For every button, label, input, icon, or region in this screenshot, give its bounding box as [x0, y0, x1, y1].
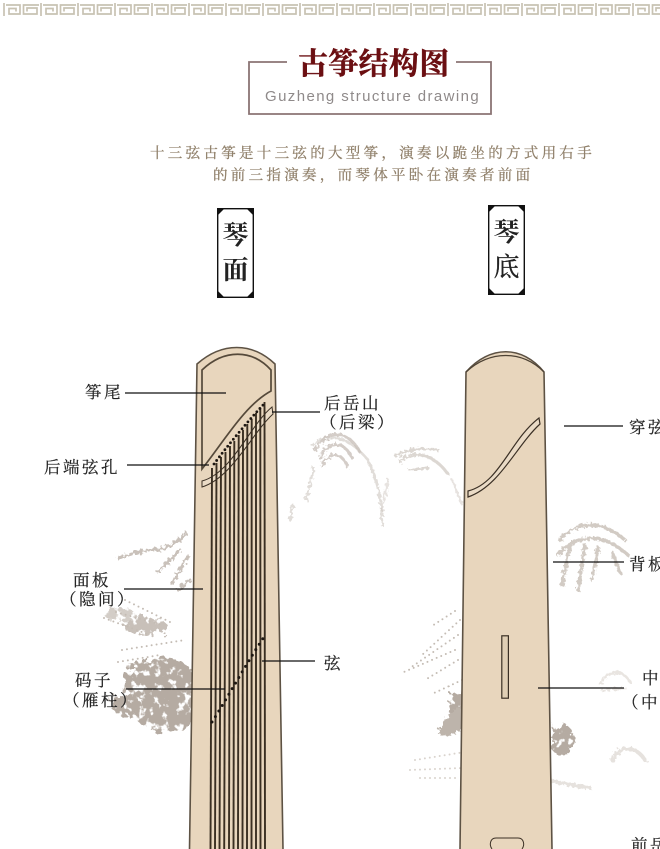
zither front view — [190, 348, 283, 849]
callout: 弦: 弦 — [324, 654, 343, 673]
callout: 后端弦孔: 后端弦孔 — [44, 458, 120, 477]
description text: 十三弦古筝是十三弦的大型筝，演奏以跪坐的方式用右手 — [150, 144, 595, 162]
callout: 面板 隐间 — [60, 571, 203, 609]
lower sound hole — [490, 838, 524, 849]
strings — [210, 402, 265, 849]
tag: 琴面: 琴 — [222, 215, 249, 252]
title box — [249, 39, 491, 114]
top meander border — [3, 3, 660, 16]
tag: 琴底: 底 — [493, 247, 520, 284]
top cap line — [466, 356, 544, 372]
callout: 穿弦孔 — [564, 418, 660, 437]
tag: 琴底 — [488, 205, 525, 295]
callout: 码子 雁柱 — [63, 671, 225, 710]
callout: 中音孔 — [538, 669, 660, 712]
callout: 码子 雁柱: 码子 — [75, 671, 113, 690]
title: 古筝结构图 — [298, 39, 450, 83]
background ink landscape — [104, 434, 645, 788]
zither back view — [460, 352, 552, 849]
subtitle english: Guzheng structure drawing — [265, 88, 480, 105]
callout: 后岳山 后梁: 后岳山 — [324, 394, 381, 413]
string holes — [214, 404, 264, 464]
description text — [150, 144, 595, 184]
tag: 琴底: 琴 — [493, 212, 520, 249]
callout: 后岳山 后梁 — [272, 394, 396, 432]
tag: 琴面 — [217, 208, 254, 298]
tag: 琴面: 面 — [222, 250, 249, 287]
bridge slot — [202, 407, 273, 487]
callout: 背板 — [553, 555, 660, 574]
callout: 后岳山 后梁: （后梁） — [320, 412, 396, 432]
callout: 面板 隐间: （隐间） — [60, 590, 136, 609]
callout: 弦 — [262, 654, 343, 673]
callout: 筝尾: 筝尾 — [85, 383, 123, 402]
description text: 的前三指演奏，而琴体平卧在演奏者前面 — [213, 166, 533, 184]
callout: 面板 隐间: 面板 — [73, 571, 111, 590]
bridges row — [212, 634, 266, 722]
middle sound hole — [502, 636, 508, 698]
S-shaped string slot — [468, 418, 540, 497]
top panel outline — [202, 354, 271, 469]
callout: 码子 雁柱: （雁柱） — [63, 691, 139, 710]
